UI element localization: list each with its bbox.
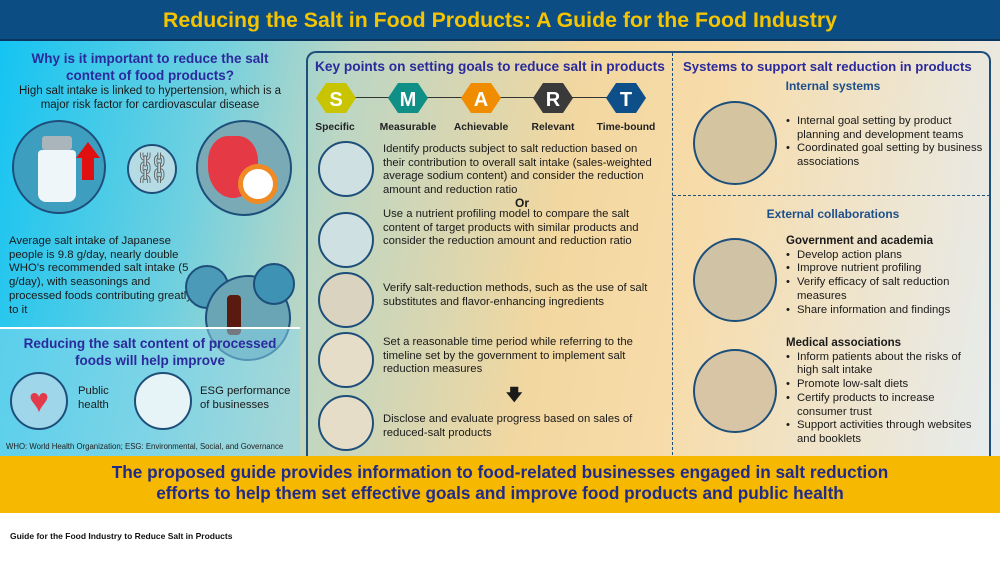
SMART row: A (474, 89, 488, 111)
block: medical: Medical associations (786, 337, 901, 349)
icon: food & WHO (185, 263, 295, 361)
icon: salt shaker (12, 120, 106, 214)
SMART row (315, 83, 655, 133)
step 5: Disclose and evaluate progress based on sales of reduced-salt products (383, 413, 632, 439)
block: government: Verify efficacy of salt reduction measures (797, 276, 949, 302)
conclusion bar: efforts to help them set effective goals and improve food products and public health (156, 483, 844, 503)
footer caption: Guide for the Food Industry to Reduce Salt in Products (10, 531, 232, 541)
subheading: internal: Internal systems (786, 79, 880, 93)
text: or: Or (515, 196, 529, 210)
block: medical: Promote low-salt diets (797, 378, 908, 390)
step 4 (318, 332, 633, 388)
SMART row: Achievable (454, 122, 508, 133)
panel: key points (315, 59, 665, 451)
panel: systems (673, 59, 989, 445)
panel: why reduce salt (9, 51, 295, 361)
step 5 (318, 395, 632, 451)
SMART row: T (620, 89, 632, 111)
icon: presentation (693, 238, 777, 322)
icon: link (127, 144, 177, 194)
SMART row: Relevant (532, 122, 575, 133)
SMART row: Time-bound (597, 122, 655, 133)
text: ESG: ESG performance (200, 385, 290, 397)
block: medical: Inform patients about the risks of high salt intake (797, 351, 961, 376)
text: public health: health (78, 399, 109, 411)
text: hypertension: High salt intake is linked to hypertension, which is a major risk factor for cardiovascular disease (19, 85, 281, 111)
icon: meeting (693, 101, 777, 185)
SMART row: M (400, 89, 416, 111)
block: medical: Certify products to increase consumer trust (797, 392, 935, 418)
block: government: Share information and findings (797, 304, 950, 316)
heading: why: Why is it important to reduce the salt content of food products? (31, 51, 269, 83)
list: internal (786, 115, 982, 168)
panel: key points & systems frame (306, 51, 991, 456)
step 4: Set a reasonable time period while referring to the timeline set by the government to implement salt reduction measures (383, 336, 633, 375)
text: average intake: Average salt intake of Japanese people is 9.8 g/day, nearly double WHO's recommended salt intake (5 g/day), with seasonings and processed foods contributing greatly to it (9, 235, 192, 316)
SMART row: R (546, 89, 561, 111)
panel: improvements (0, 327, 300, 456)
footnote: WHO: World Health Organization; ESG: Environmental, Social, and Governance (6, 442, 283, 451)
arrow down: 🡇 (506, 387, 522, 404)
block: medical (786, 337, 972, 445)
step 2: Use a nutrient profiling model to compare the salt content of target products with similar products and consider the reduction amount and reduction ratio (383, 208, 639, 247)
background gradient (0, 40, 1000, 456)
subheading: external: External collaborations (767, 207, 899, 221)
text: public health: Public (78, 385, 109, 397)
block: government (786, 235, 950, 316)
list: internal: Coordinated goal setting by business associations (797, 142, 982, 168)
step 3 (318, 272, 648, 328)
icon: medical (693, 349, 777, 433)
icon: link: ⛓ (133, 152, 171, 185)
icon: public health (10, 372, 68, 430)
heading: key points: Key points on setting goals to reduce salt in products (315, 59, 665, 74)
conclusion bar (0, 456, 1000, 513)
block: government: Government and academia (786, 235, 933, 247)
icon: ESG (134, 372, 192, 430)
text: ESG: of businesses (200, 399, 269, 411)
conclusion bar: The proposed guide provides information to food-related businesses engaged in salt reduction (112, 462, 888, 482)
header (0, 0, 1000, 41)
SMART row: Specific (315, 122, 355, 133)
text: ESG (200, 385, 290, 411)
icon: public health: ♥ (29, 382, 49, 420)
block: government: Develop action plans (797, 249, 902, 261)
block: government: Improve nutrient profiling (797, 262, 921, 274)
SMART row: S (329, 89, 343, 111)
step 2 (318, 208, 639, 268)
SMART row: Measurable (380, 122, 437, 133)
header: Reducing the Salt in Food Products: A Guide for the Food Industry (163, 8, 837, 32)
text: public health (78, 385, 109, 411)
step 3: Verify salt-reduction methods, such as the use of salt substitutes and flavor-enhancing ingredients (383, 282, 647, 308)
heading: improve: Reducing the salt content of processed foods will help improve (24, 336, 276, 368)
block: medical: Support activities through websites and booklets (797, 419, 972, 445)
list: internal: Internal goal setting by product planning and development teams (797, 115, 963, 141)
icon: heart gauge (196, 120, 292, 216)
step 1: Identify products subject to salt reduction based on their contribution to overall salt intake (sales-weighted average sodium content) and consider the reduction amount and reduction ratio (383, 143, 652, 196)
heading: systems: Systems to support salt reduction in products (683, 59, 972, 74)
